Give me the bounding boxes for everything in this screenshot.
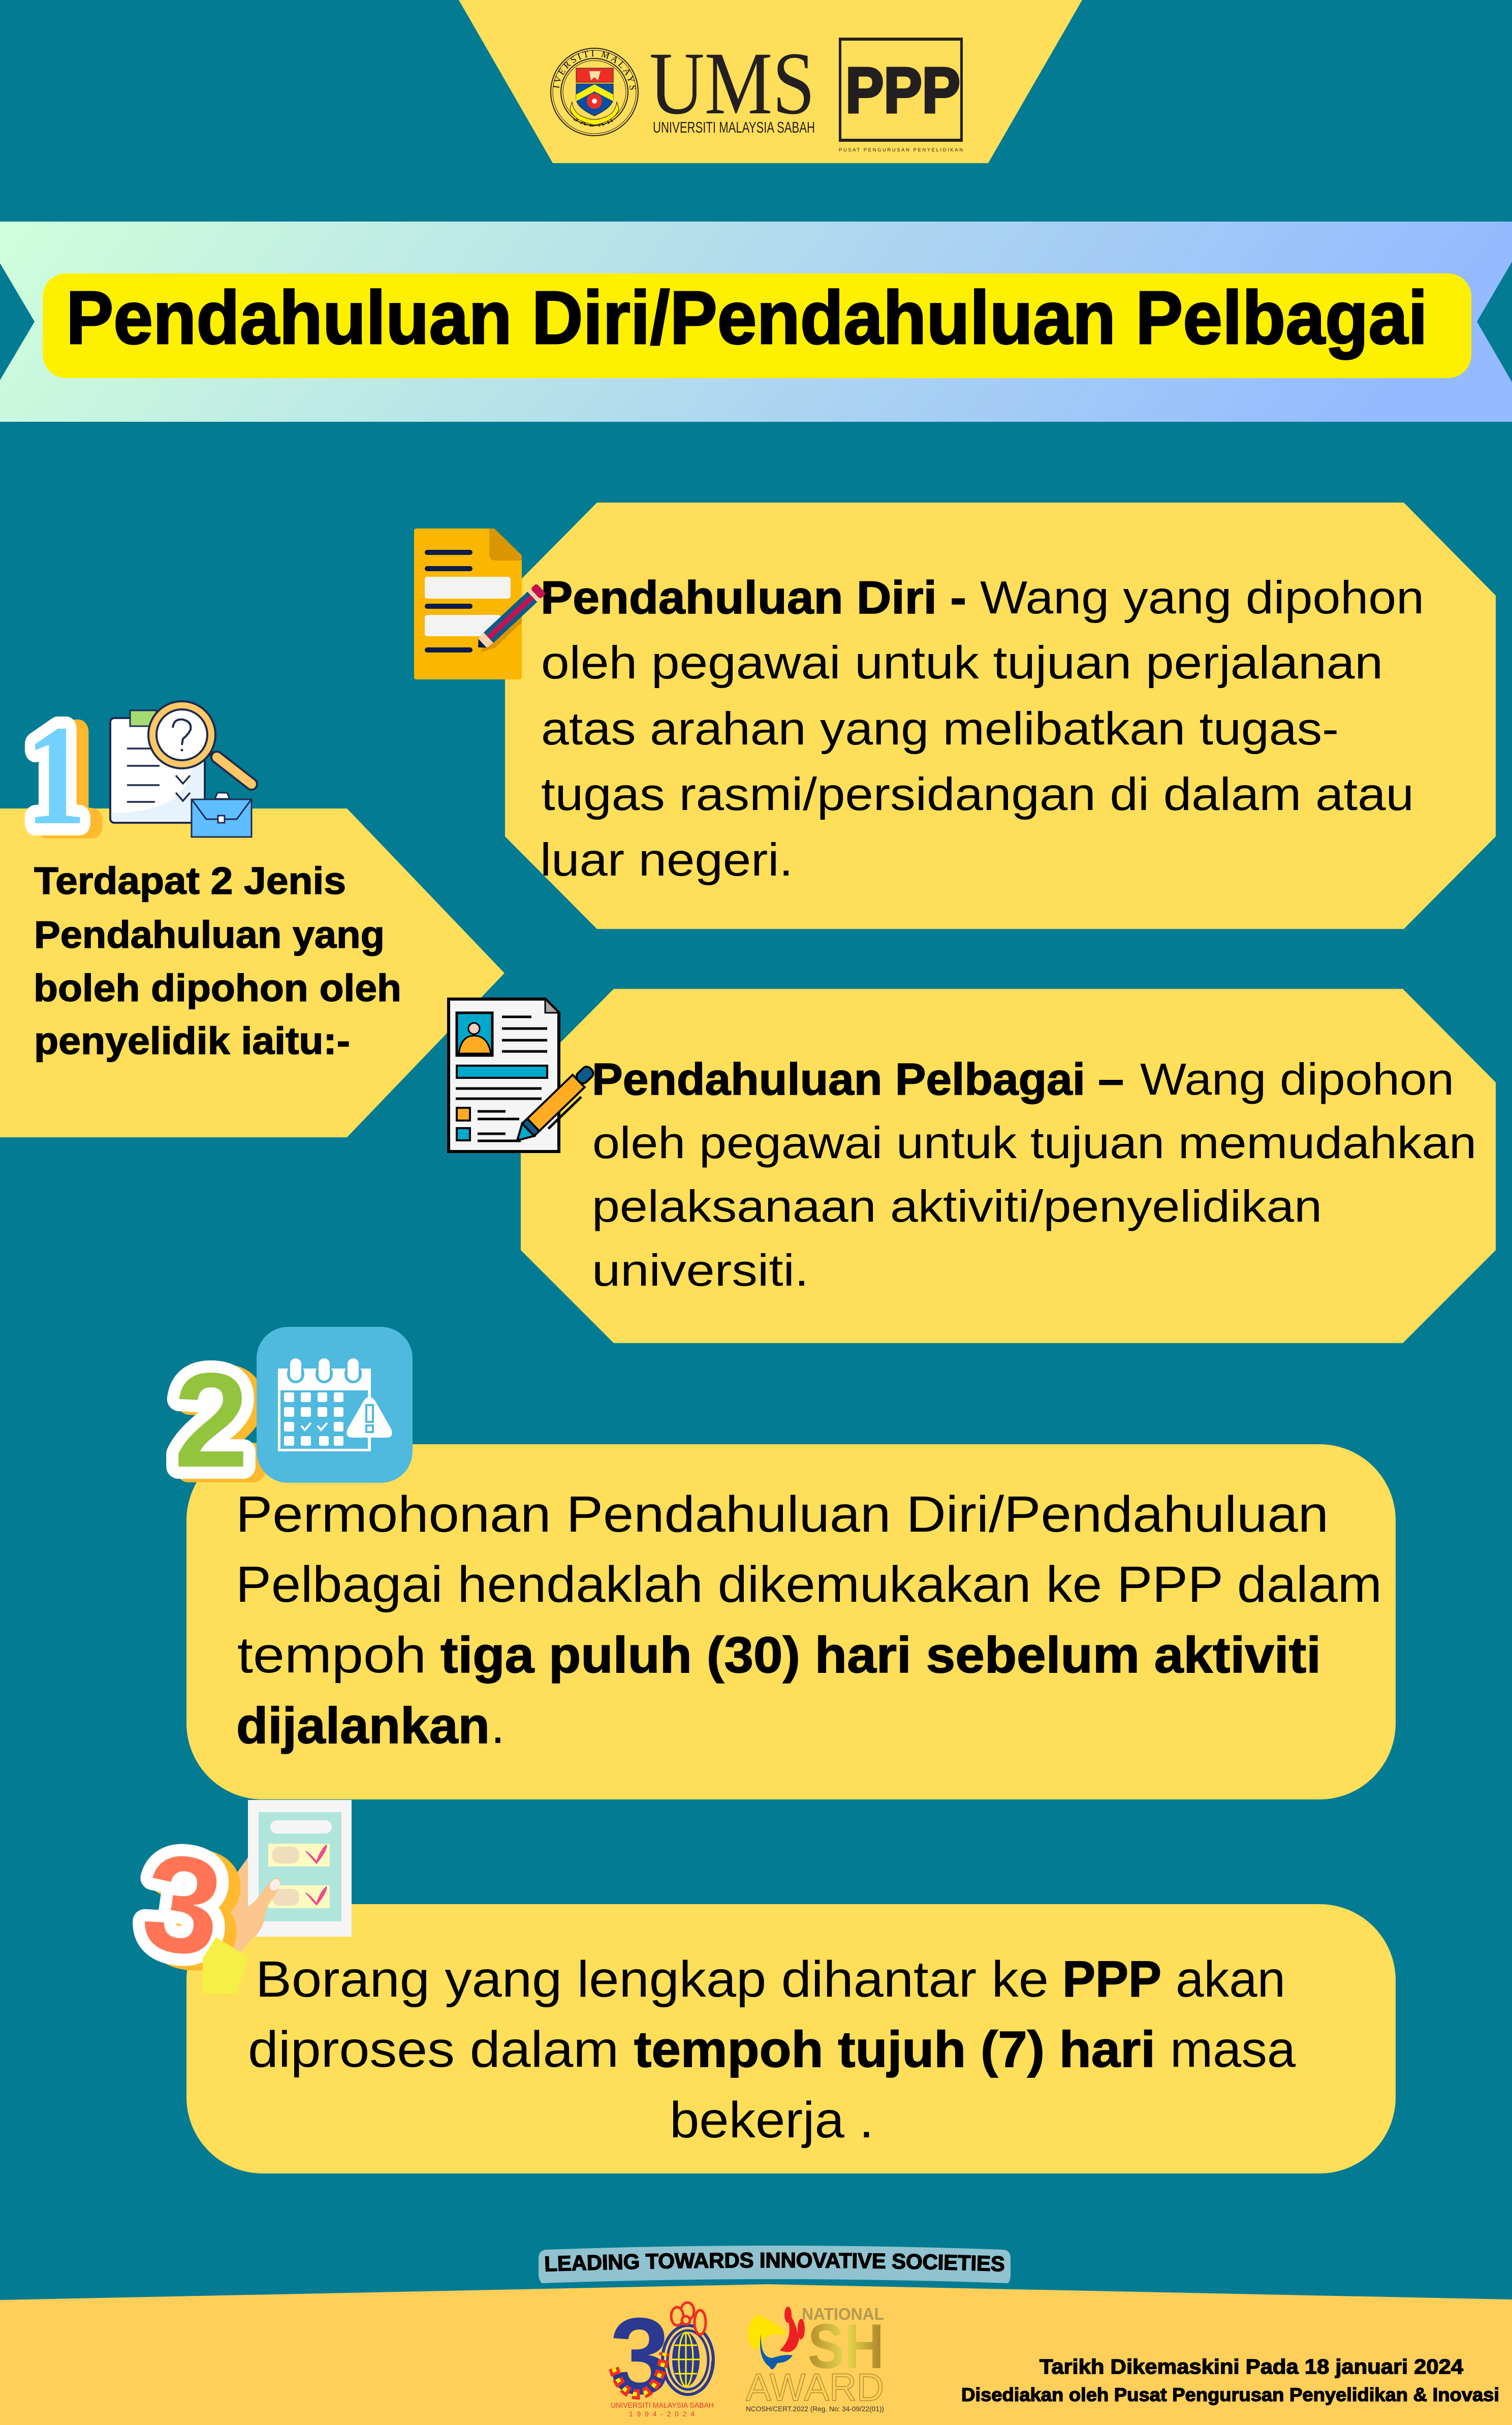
logo: National OSH Award: NATIONAL: [802, 2305, 884, 2323]
panel 1: left arrow callout: [0, 809, 505, 1137]
text: step 2: dijalankan: [236, 1697, 490, 1754]
text: Pendahuluan Diri definition: Wang yang dipohon: [980, 572, 1424, 624]
callout text: penyelidik iaitu:-: [34, 1019, 350, 1062]
sleeve of hand: [203, 1937, 248, 1994]
logo: PPP box: PUSAT PENGURUSAN PENYELIDIKAN: [839, 147, 963, 153]
text: Pendahuluan Pelbagai definition: universiti.: [592, 1245, 809, 1295]
text: step 3: tempoh tujuh (7) hari: [634, 2021, 1155, 2078]
tagline pill: LEADING TOWARDS INNOVATIVE SOCIETIES: [545, 2252, 1004, 2272]
icon: resume with pen: [449, 999, 600, 1152]
text: step 2: Pelbagai hendaklah dikemukakan ke PPP dalam: [236, 1556, 1382, 1613]
text: step 2: Permohonan Pendahuluan Diri/Pendahuluan: [236, 1486, 1329, 1543]
text: Pendahuluan Pelbagai definition: Wang dipohon: [1140, 1054, 1454, 1104]
logo: UMS 30th anniversary: 1994-2024: [629, 2410, 695, 2418]
number 1 badge: 1: [25, 696, 86, 854]
panel: step 3: [186, 1904, 1396, 2173]
text: step 2: [236, 1486, 1382, 1754]
logo: UMS wordmark: UMS: [649, 34, 815, 133]
footer text: Tarikh Dikemaskini Pada 18 januari 2024: [1040, 2355, 1463, 2378]
callout text: Pendahuluan yang: [34, 913, 385, 956]
logo: UMS wordmark: UNIVERSITI MALAYSIA SABAH: [653, 118, 815, 136]
icon: clipboard with magnifier and briefcase: [110, 701, 251, 837]
footer text: [961, 2355, 1499, 2405]
panel: step 2: [186, 1444, 1396, 1799]
footer text: Disediakan oleh Pusat Pengurusan Penyelidikan & Inovasi: [961, 2384, 1499, 2405]
text: step 2: .: [491, 1697, 505, 1754]
panel: Pendahuluan Pelbagai: [521, 989, 1496, 1343]
text: step 3: akan: [1176, 1951, 1285, 2008]
icon: calendar with warning: [257, 1327, 413, 1483]
logo: UMS 30th anniversary: [610, 2295, 714, 2418]
number 2 badge: 2: [174, 1345, 248, 1496]
number 3 badge: 3: [134, 1824, 231, 1986]
text: step 3: masa: [1170, 2021, 1296, 2078]
logo: National OSH Award: SH: [808, 2312, 884, 2382]
title banner: [0, 222, 1512, 422]
text: step 2: tiga puluh (30) hari sebelum aktiviti: [440, 1627, 1321, 1684]
text: Pendahuluan Diri definition: tugas rasmi/persidangan di dalam atau: [541, 769, 1414, 820]
text: Pendahuluan Pelbagai definition: oleh pegawai untuk tujuan memudahkan: [592, 1117, 1476, 1168]
text: Pendahuluan Diri definition: oleh pegawai untuk tujuan perjalanan: [541, 637, 1383, 689]
hand: [218, 1857, 282, 1952]
text: step 3: Borang yang lengkap dihantar ke: [256, 1951, 1049, 2008]
callout text: Terdapat 2 Jenis: [34, 859, 346, 902]
icon: tablet checklist with hand: [218, 1800, 352, 1952]
callout text: boleh dipohon oleh: [34, 967, 401, 1009]
logo: UMS crest: SABAH: [573, 118, 613, 127]
text: Pendahuluan Diri definition: atas arahan yang melibatkan tugas-: [541, 703, 1339, 755]
text: step 3: diproses dalam: [248, 2021, 619, 2078]
text: step 3: [248, 1951, 1296, 2149]
text: Pendahuluan Pelbagai definition: [592, 1054, 1476, 1295]
logo: National OSH Award: [746, 2305, 884, 2413]
logo: UMS 30th anniversary: 3: [610, 2295, 670, 2417]
text: step 3: bekerja .: [670, 2092, 874, 2149]
callout text: [34, 859, 401, 1062]
footer band: [0, 2284, 1512, 2425]
logo: PPP box: PPP: [845, 54, 960, 126]
text: Pendahuluan Diri definition: [540, 572, 1424, 886]
header logo panel: [459, 0, 1082, 163]
text: Pendahuluan Pelbagai definition: pelaksanaan aktiviti/penyelidikan: [592, 1181, 1322, 1231]
text: Pendahuluan Diri definition: luar negeri.: [540, 834, 793, 886]
heading: Pendahuluan Diri/Pendahuluan Pelbagai: [66, 276, 1428, 360]
text: Pendahuluan Pelbagai definition: Pendahuluan Pelbagai –: [592, 1054, 1124, 1104]
text: step 3: PPP: [1062, 1951, 1161, 2008]
logo: PPP box: [839, 38, 963, 153]
logo: National OSH Award: NCOSH/CERT.2022 (Reg. No: 34-09/22(01)): [746, 2405, 884, 2413]
logo: UMS 30th anniversary: UNIVERSITI MALAYSIA SABAH: [611, 2402, 714, 2410]
panel: Pendahuluan Diri: [505, 503, 1496, 929]
text: Pendahuluan Diri definition: Pendahuluan Diri -: [541, 572, 966, 624]
icon: orange document with pencil: [414, 528, 546, 679]
logo: UMS crest: [0, 0, 638, 136]
text: step 2: tempoh: [237, 1627, 426, 1684]
logo: National OSH Award: AWARD: [746, 2366, 884, 2409]
